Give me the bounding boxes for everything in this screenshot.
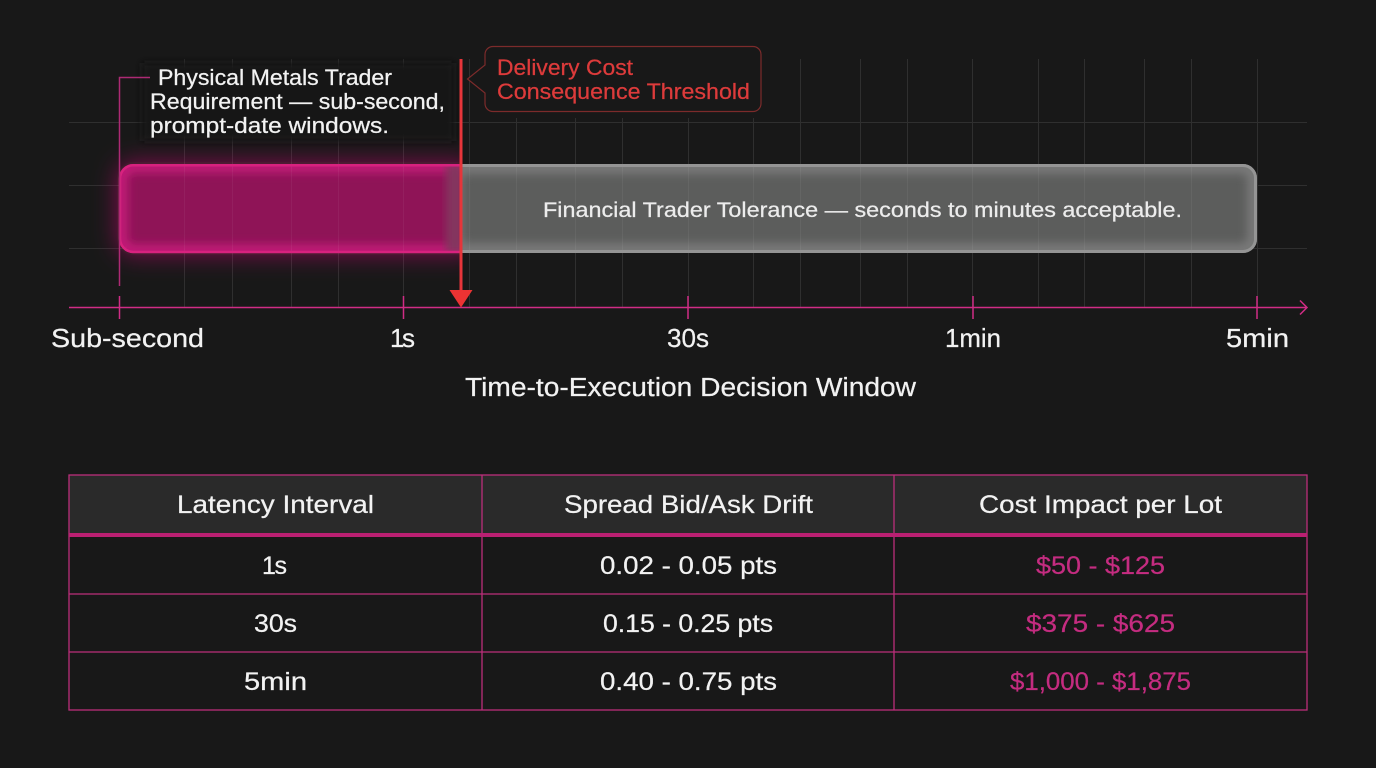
chart: decision window timeline — [51, 40, 1307, 402]
row: 5min: $1,000 - $1,875 — [1010, 668, 1191, 696]
text: physical metals trader requirement: Physical Metals Trader — [158, 65, 392, 90]
row: 5min — [244, 668, 1191, 696]
row: 5min: 5min — [244, 668, 307, 696]
text: physical metals trader requirement — [150, 65, 445, 138]
callout text: Consequence Threshold — [497, 79, 750, 104]
axis tick labels: 5min — [1226, 323, 1289, 353]
table header row — [69, 475, 1307, 534]
table: latency cost impact — [69, 475, 1307, 710]
axis tick labels: Sub-second — [51, 323, 204, 353]
axis tick labels — [51, 323, 1289, 353]
infographic canvas — [52, 46, 1308, 711]
bracket: physical metals leader line — [120, 78, 150, 286]
axis title: Time-to-Execution Decision Window — [465, 374, 917, 402]
text: physical metals trader requirement: Requirement — sub-second, — [150, 89, 445, 114]
callout: delivery cost consequence threshold — [468, 46, 761, 112]
axis tick labels: 1s — [390, 323, 415, 353]
table header row: Latency Interval — [177, 491, 374, 519]
table header row: Spread Bid/Ask Drift — [564, 491, 813, 519]
text: physical metals trader requirement: prompt-date windows. — [150, 113, 389, 138]
row: 30s — [254, 610, 1175, 638]
axis tick labels: 30s — [667, 323, 709, 353]
row: 1s: $50 - $125 — [1036, 552, 1165, 580]
row: 5min: 0.40 - 0.75 pts — [600, 668, 777, 696]
arrow: delivery cost threshold marker — [450, 59, 472, 308]
callout text: Delivery Cost — [497, 55, 633, 80]
row: 30s: 0.15 - 0.25 pts — [603, 610, 773, 638]
row: 30s: 30s — [254, 610, 297, 638]
time axis — [51, 296, 1307, 353]
row: 1s: 0.02 - 0.05 pts — [600, 552, 777, 580]
row: 1s: 1s — [262, 552, 287, 580]
label: financial trader tolerance: Financial Trader Tolerance — seconds to minutes acceptable. — [543, 199, 1182, 222]
bar: physical metals requirement — [117, 162, 521, 255]
bar: financial trader tolerance — [455, 164, 1257, 253]
axis tick labels: 1min — [945, 323, 1001, 353]
callout text — [497, 55, 750, 104]
table grid lines — [69, 475, 1307, 710]
row: 30s: $375 - $625 — [1026, 610, 1175, 638]
table header row: Cost Impact per Lot — [979, 491, 1222, 519]
row: 1s — [262, 552, 1165, 580]
